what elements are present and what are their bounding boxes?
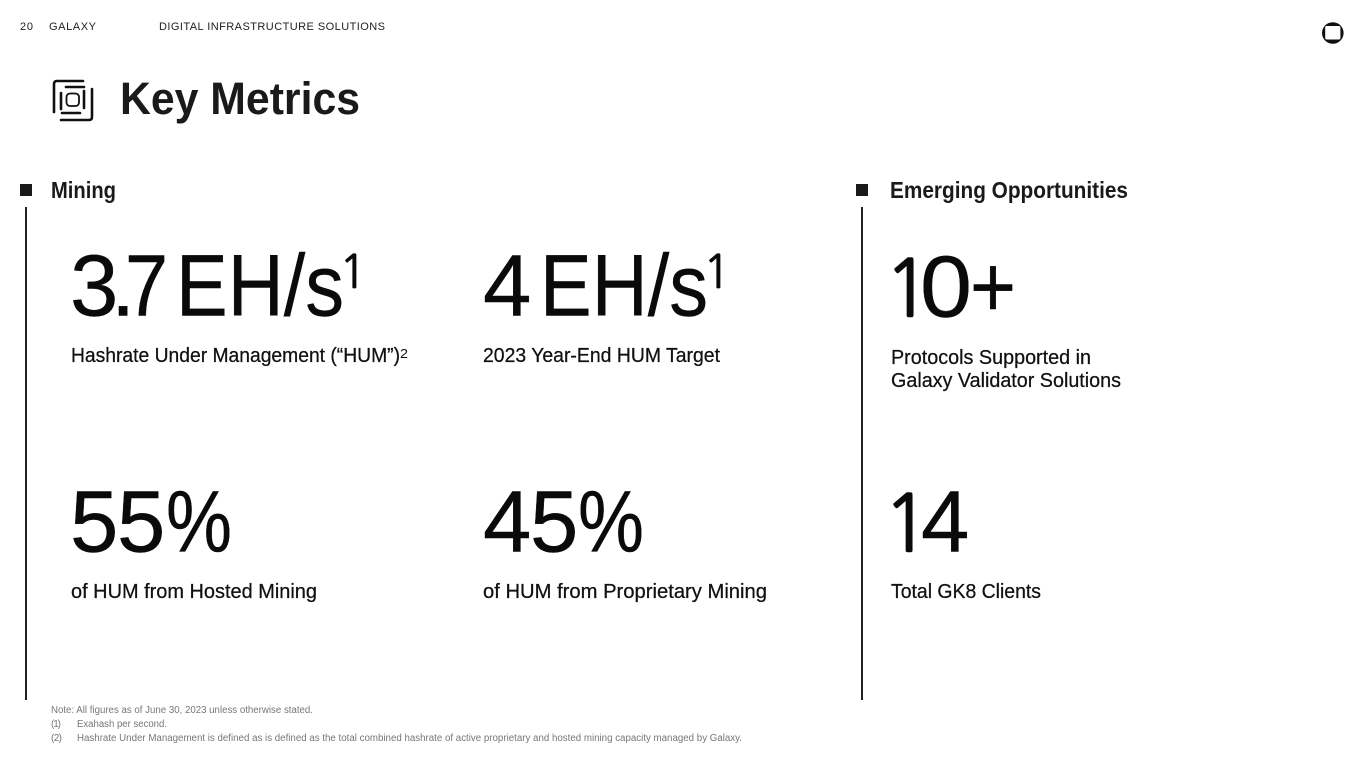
footnotes: Exahash per second. xyxy=(77,719,167,730)
metric: year-end target: 2023 Year-End HUM Target xyxy=(483,345,720,367)
metric: proprietary mining share: 45 xyxy=(483,474,578,570)
footnotes xyxy=(51,705,742,744)
metric: gk8 clients: 1 xyxy=(883,486,930,564)
metric: hashrate under management: 2 xyxy=(400,346,408,361)
section name: DIGITAL INFRASTRUCTURE SOLUTIONS xyxy=(159,21,385,33)
footnotes: (1) xyxy=(51,719,61,730)
metric: protocols supported: 1 xyxy=(884,250,931,328)
metric: hashrate under management xyxy=(70,238,408,367)
panel: mining xyxy=(20,177,767,700)
metric: hosted mining share: of HUM from Hosted Mining xyxy=(71,581,317,603)
metric: protocols supported: 0 xyxy=(920,238,972,336)
metric: proprietary mining share: % xyxy=(578,474,644,570)
metric: year-end target xyxy=(483,238,731,367)
metric: year-end target: 4 xyxy=(483,238,531,334)
metric: proprietary mining share xyxy=(483,474,767,603)
icon: galaxy logo xyxy=(1322,22,1344,44)
metric: hosted mining share: 55 xyxy=(70,474,165,570)
footnotes: (2) xyxy=(51,733,62,744)
metric: protocols supported: Galaxy Validator Solutions xyxy=(891,370,1121,392)
metric: hashrate under management: 7 xyxy=(125,238,168,334)
page header xyxy=(20,21,385,33)
metric: hashrate under management: 1 xyxy=(339,249,367,295)
metric: gk8 clients: 4 xyxy=(921,474,969,570)
metric: gk8 clients xyxy=(883,474,1041,603)
metric: protocols supported: + xyxy=(970,238,1016,336)
metric: hashrate under management: 3. xyxy=(70,238,135,334)
metric: year-end target: 1 xyxy=(703,249,731,295)
title: Key Metrics xyxy=(120,73,360,124)
brand name: GALAXY xyxy=(49,21,97,33)
mining rule xyxy=(25,207,27,700)
footnotes: Hashrate Under Management is defined as is defined as the total combined hashrate of active proprietary and hosted mining capacity managed by Galaxy. xyxy=(77,733,742,744)
metric: hosted mining share: % xyxy=(166,474,232,570)
page number: 20 xyxy=(20,21,33,33)
panel: emerging opportunities xyxy=(856,177,1128,700)
mining bullet xyxy=(20,184,32,196)
metric: protocols supported: Protocols Supported in xyxy=(891,347,1091,369)
metric: gk8 clients: Total GK8 Clients xyxy=(891,581,1041,603)
metric: proprietary mining share: of HUM from Proprietary Mining xyxy=(483,581,767,603)
emerging rule xyxy=(861,207,863,700)
footnotes: Note: All figures as of June 30, 2023 unless otherwise stated. xyxy=(51,705,313,716)
metric: year-end target: EH/s xyxy=(540,238,708,334)
emerging bullet xyxy=(856,184,868,196)
icon: key metrics concentric squares xyxy=(54,81,92,120)
emerging heading: Emerging Opportunities xyxy=(890,177,1128,203)
mining heading: Mining xyxy=(51,177,116,203)
metric: hashrate under management: EH/s xyxy=(176,238,344,334)
metric: hashrate under management: Hashrate Under Management (“HUM”) xyxy=(71,345,400,367)
metric: hosted mining share xyxy=(70,474,317,603)
metric: protocols supported xyxy=(884,238,1121,392)
